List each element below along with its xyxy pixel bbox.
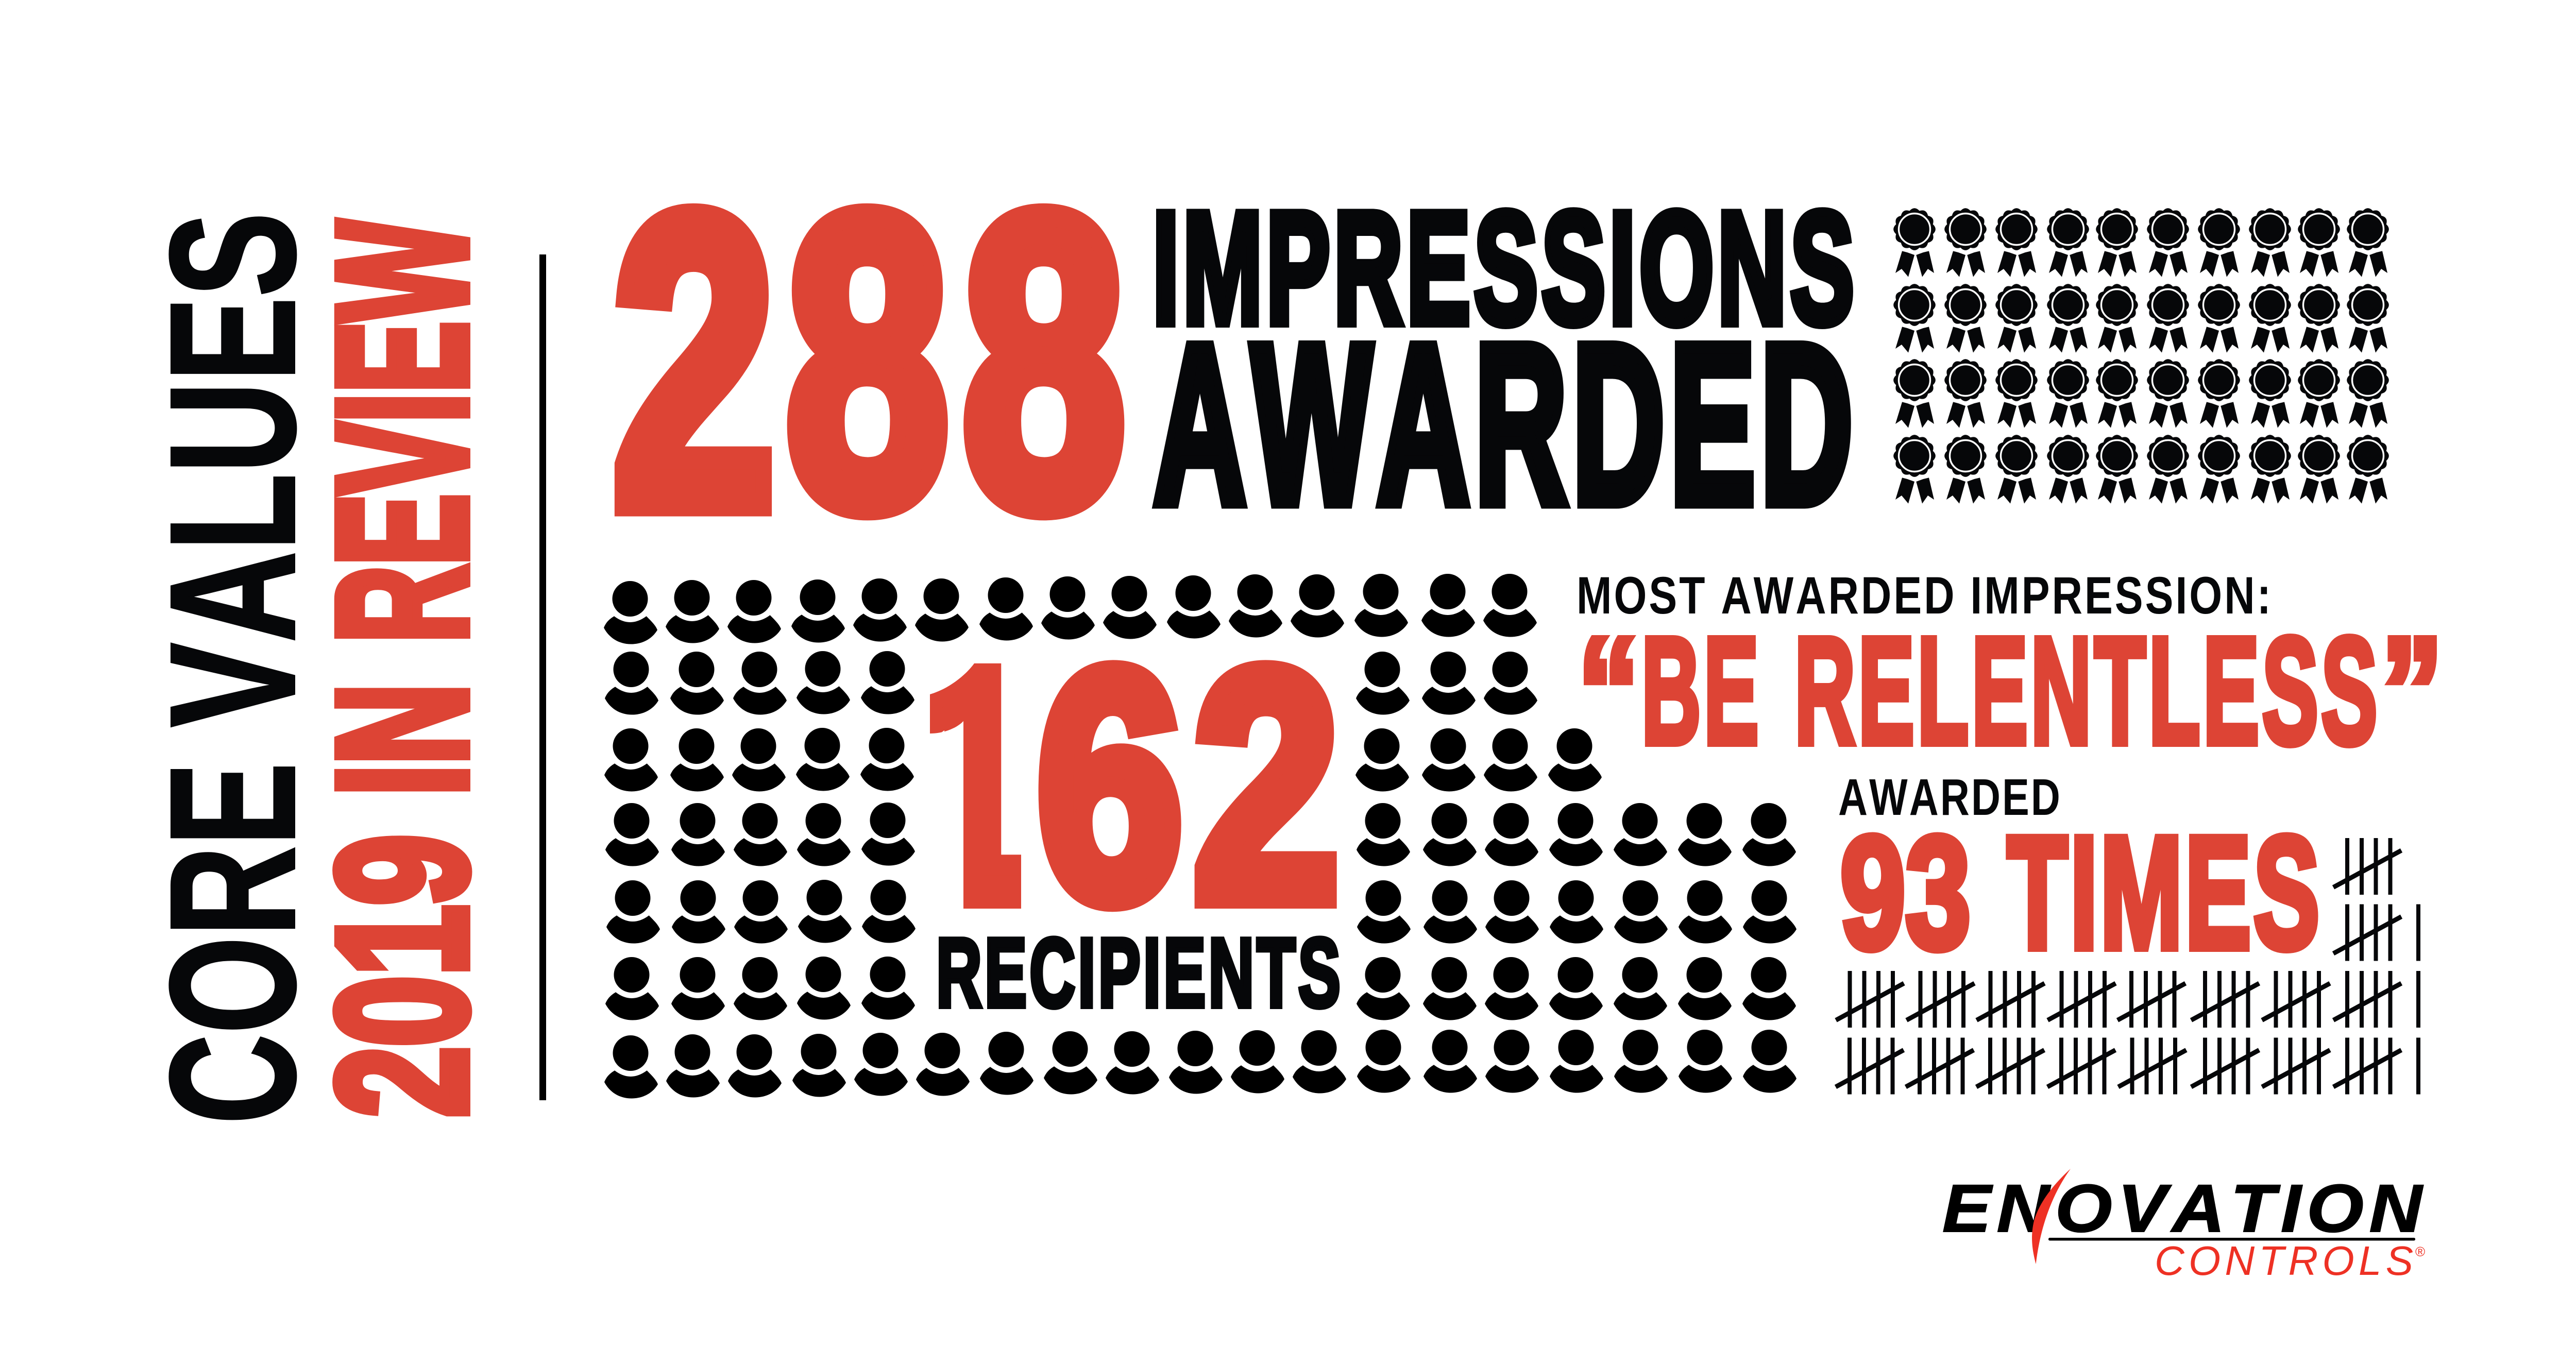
logo: Enovation Controls bbox=[1942, 1169, 2428, 1284]
quote: be relentless bbox=[1578, 606, 2443, 776]
label: awarded: AWARDED bbox=[1838, 769, 2062, 826]
digit 2: 2 bbox=[613, 129, 775, 593]
digit 8: 8 bbox=[786, 129, 949, 593]
digit 1: 1 bbox=[887, 603, 1045, 968]
title word: core: CORE bbox=[133, 762, 332, 1124]
digit 6: 6 bbox=[1037, 603, 1182, 968]
label: most awarded impression: MOST AWARDED IMPRESSION: bbox=[1577, 566, 2273, 625]
digit 2: 2 bbox=[1194, 603, 1339, 968]
stat: 162 bbox=[930, 660, 1337, 912]
title: Core Values bbox=[133, 212, 332, 1124]
infographic canvas bbox=[168, 203, 2437, 1275]
digit 8: 8 bbox=[962, 129, 1125, 593]
number 93: 93 bbox=[1840, 803, 1971, 982]
quoted word: be: BE bbox=[1641, 606, 1761, 776]
subtitle: 2019 in Review bbox=[300, 219, 504, 1117]
heading line: awarded: AWARDED bbox=[1154, 298, 1858, 550]
logo swoosh bbox=[2032, 1169, 2071, 1264]
logo wordmark: ENOVATION bbox=[1942, 1170, 2428, 1246]
heading line: impressions: IMPRESSIONS bbox=[1153, 179, 1858, 357]
title word: values: VALUES bbox=[133, 212, 332, 727]
label: recipients: RECIPIENTS bbox=[936, 918, 1343, 1028]
word: times: TIMES bbox=[2007, 803, 2322, 982]
closing quotation mark: ” bbox=[2381, 606, 2443, 776]
subtitle year: 2019 bbox=[300, 834, 504, 1117]
logo sub-mark: controls: CONTROLS bbox=[2155, 1238, 2413, 1284]
stat: 288 bbox=[613, 129, 1125, 593]
heading: impressions awarded bbox=[1153, 179, 1858, 550]
icon grid: people bbox=[604, 574, 1797, 1098]
stat: 93 times bbox=[1840, 803, 2322, 982]
icon grid: award ribbons bbox=[1893, 208, 2389, 504]
divider line bbox=[539, 254, 546, 1100]
subtitle word: in: IN bbox=[300, 684, 504, 796]
opening quotation mark: “ bbox=[1578, 606, 1639, 776]
tally marks: 93 bbox=[1836, 838, 2420, 1094]
logo rule bbox=[2048, 1238, 2415, 1240]
registered mark: ® bbox=[2415, 1244, 2425, 1259]
